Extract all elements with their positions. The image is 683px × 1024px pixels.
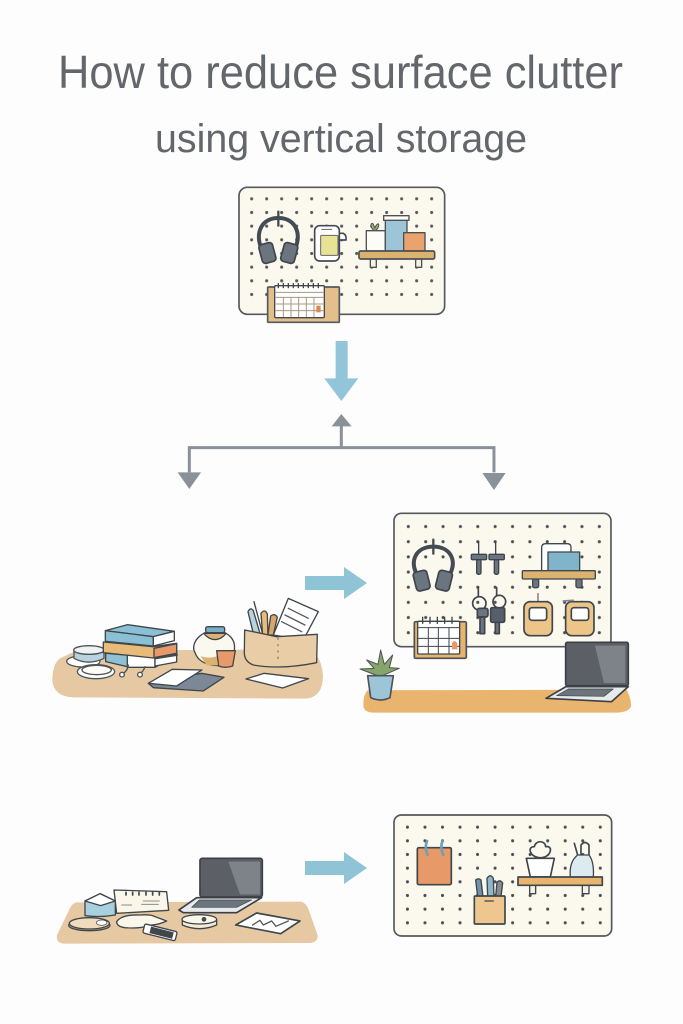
desk surface (363, 690, 631, 713)
icon: coaster (69, 918, 110, 931)
panel: cluttered desk 2 (57, 858, 318, 944)
icon: storage pouches (524, 593, 594, 636)
icon: calendar (414, 617, 466, 658)
icon: tape roll (182, 915, 217, 929)
desk surface (52, 649, 323, 699)
icon: headphones (413, 540, 453, 592)
icon: laptop (179, 858, 262, 913)
icon: laptop (546, 642, 628, 702)
icon: hanging mug (315, 226, 346, 261)
icon: headphones (258, 212, 299, 264)
panel: top pegboard (239, 187, 445, 322)
icon: stack of books (103, 625, 177, 667)
icon: plate (117, 915, 167, 928)
icon: calendar (268, 284, 339, 322)
icon: shelf with plant and bottle (518, 842, 602, 894)
icon: hanging keys (473, 588, 506, 634)
icon: loose paper (246, 673, 309, 688)
title (58, 46, 623, 161)
panel: cluttered desk 1 (52, 598, 323, 699)
arrow: blue right arrow 2 (305, 852, 367, 884)
icon: tape and plates (67, 646, 115, 679)
desk surface (57, 902, 318, 944)
title: using vertical storage (155, 117, 527, 161)
icon: shelf with folder (522, 544, 595, 588)
panel: organized desk 1 (360, 513, 631, 713)
icon: pouch (85, 894, 115, 917)
icon: shelf with containers (359, 216, 435, 267)
arrow: blue down arrow (324, 341, 358, 401)
arrow: blue right arrow 1 (305, 567, 367, 599)
icon: potted plant (360, 650, 399, 700)
icon: pen holder (474, 876, 505, 924)
icon: phone (143, 924, 177, 941)
icon: pens and paper in holder (244, 598, 318, 667)
icon: hanging tools (471, 542, 504, 574)
panel: organized pegboard 2 (394, 815, 612, 936)
arrow: grey branching connector (178, 414, 506, 490)
icon: chart paper (236, 913, 300, 934)
icon: cords (123, 665, 145, 673)
icon: orange notepad (417, 841, 451, 885)
icon: tablet and notebook (148, 669, 224, 691)
icon: notepad (114, 890, 169, 913)
icon: jar and cup (194, 627, 235, 667)
pegboard (394, 513, 611, 647)
title: How to reduce surface clutter (58, 46, 623, 98)
